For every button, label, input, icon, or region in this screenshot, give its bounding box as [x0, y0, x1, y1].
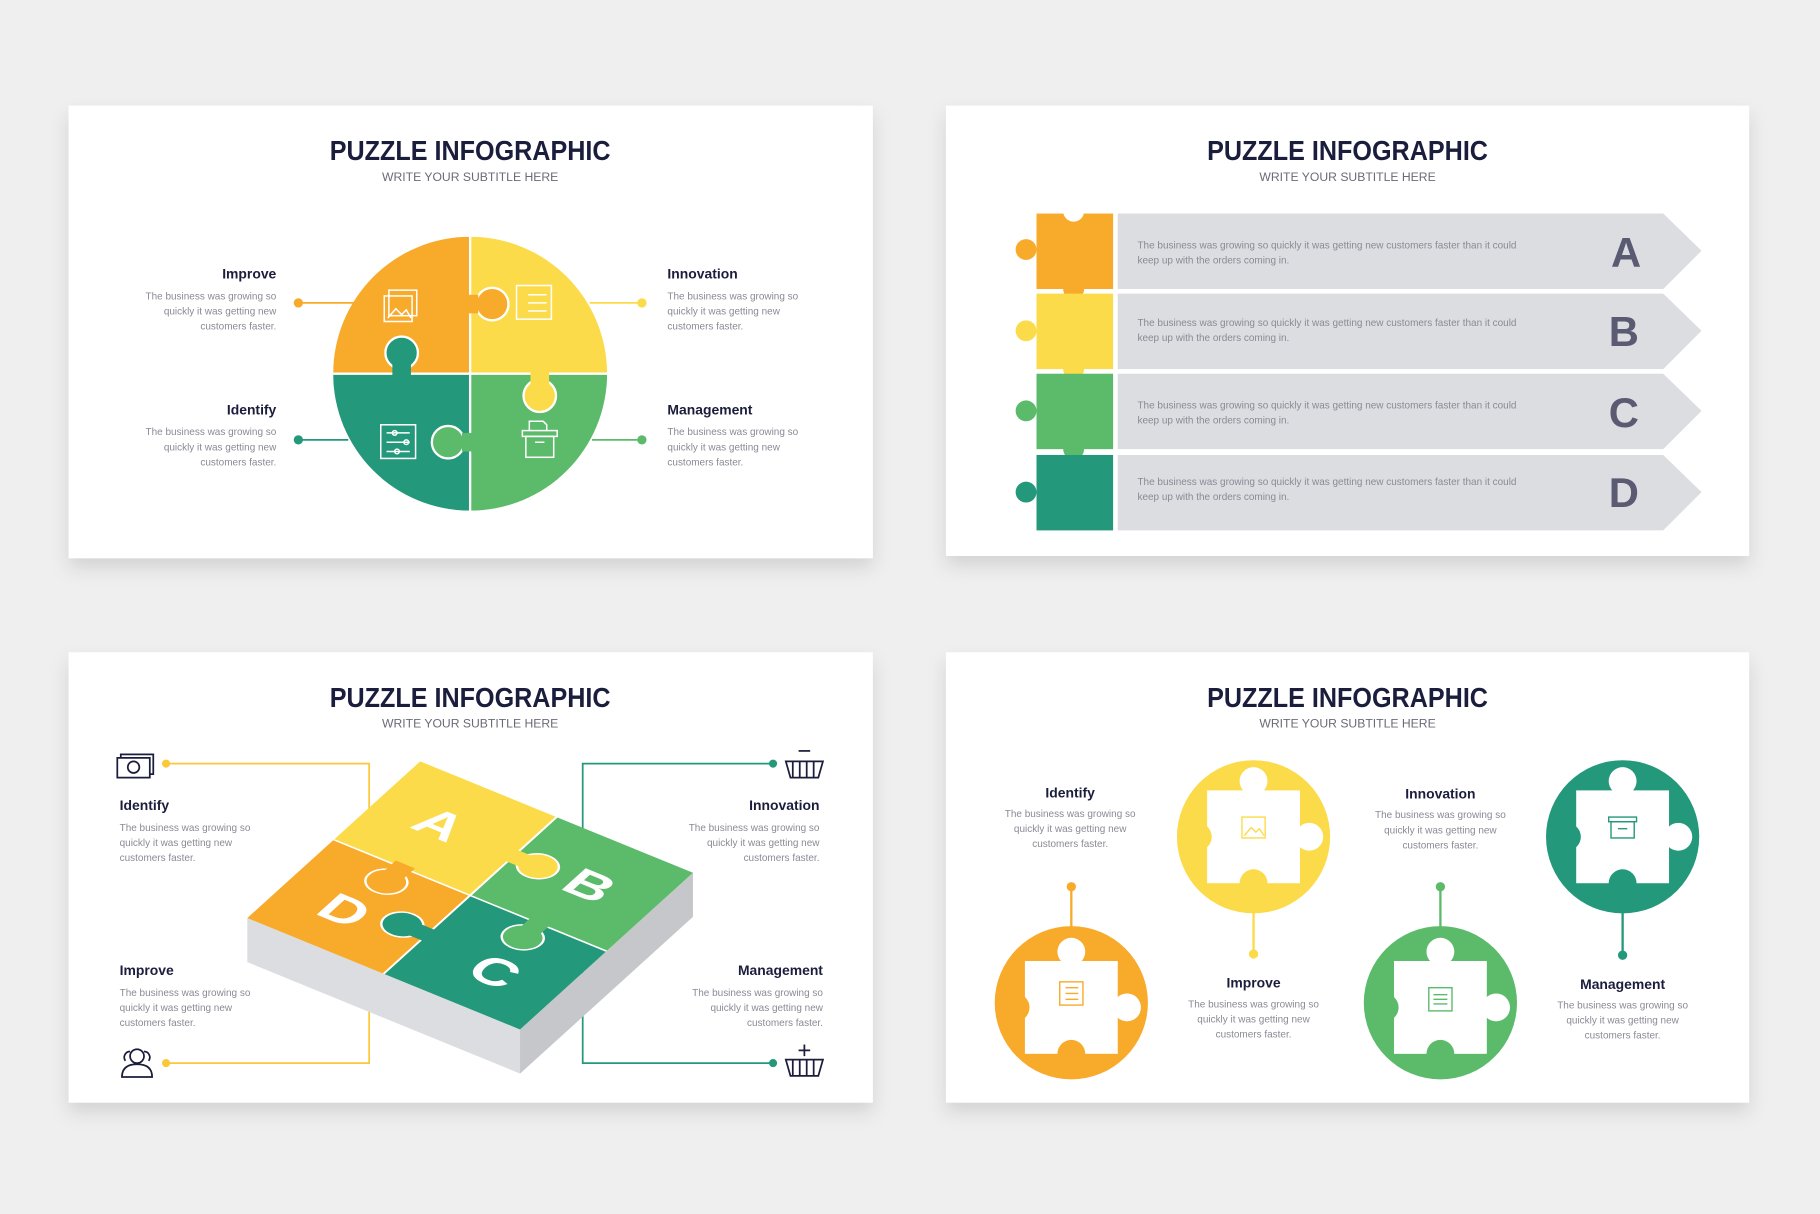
chart: circle puzzle [333, 237, 607, 511]
text: Identify: The business was growing so [120, 823, 251, 834]
text: Management: Management [738, 962, 823, 978]
row A: keep up with the orders coming in. [1137, 255, 1289, 266]
callout: Management: Management [667, 401, 753, 417]
icon: list [517, 286, 551, 319]
callout: Improve: quickly it was getting new [164, 307, 277, 318]
text: Improve: The business was growing so [1188, 999, 1319, 1010]
subtitle: WRITE YOUR SUBTITLE HERE [382, 717, 558, 731]
text: Management: Management [1580, 976, 1665, 992]
callout: Management [592, 401, 799, 468]
icon: users [122, 1049, 152, 1077]
text: Improve: The business was growing so [120, 988, 251, 999]
row C: keep up with the orders coming in. [1137, 416, 1289, 427]
text: Improve: quickly it was getting new [120, 1003, 233, 1014]
text: Innovation: Innovation [1405, 786, 1476, 802]
circle: orange [995, 882, 1148, 1079]
circle: yellow [1177, 760, 1330, 959]
chart: isometric puzzle board: B [550, 861, 628, 911]
text: Improve: customers faster. [120, 1018, 196, 1029]
subtitle: WRITE YOUR SUBTITLE HERE [1259, 717, 1436, 731]
chart: isometric puzzle board: D [305, 885, 383, 936]
callout: Identify: The business was growing so [146, 427, 277, 438]
text: Identify: quickly it was getting new [120, 838, 233, 849]
text: Management: quickly it was getting new [710, 1003, 824, 1014]
text: Management: customers faster. [747, 1018, 823, 1029]
text: Innovation: The business was growing so [689, 823, 820, 834]
text: Identify: The business was growing so [1005, 809, 1136, 820]
chart: isometric puzzle board [247, 761, 693, 1074]
row C [1016, 374, 1702, 460]
chart: isometric puzzle board: C [455, 947, 533, 998]
row D: keep up with the orders coming in. [1137, 492, 1289, 503]
text: Improve: customers faster. [1216, 1030, 1291, 1041]
callout: Management: quickly it was getting new [667, 442, 781, 453]
text: Innovation [1375, 786, 1506, 851]
callout: Innovation: Innovation [667, 266, 738, 282]
subtitle: WRITE YOUR SUBTITLE HERE [382, 170, 558, 184]
text: Management [692, 962, 824, 1029]
text: Management: The business was growing so [692, 988, 823, 999]
text: Identify: Identify [1045, 784, 1095, 800]
row B: The business was growing so quickly it was getting new customers faster than it could [1137, 318, 1516, 329]
row A: A [1611, 229, 1641, 276]
circle: green [1364, 882, 1517, 1079]
row D: The business was growing so quickly it was getting new customers faster than it could [1137, 477, 1516, 488]
callout: Identify: quickly it was getting new [164, 442, 277, 453]
text: Innovation: quickly it was getting new [707, 838, 820, 849]
subtitle: WRITE YOUR SUBTITLE HERE [1259, 170, 1436, 184]
icon: box [522, 421, 557, 457]
text: Identify: Identify [120, 797, 169, 813]
text: Identify: customers faster. [1032, 839, 1108, 850]
icon: basket minus [786, 751, 823, 778]
row D: D [1609, 469, 1639, 516]
row D [1016, 455, 1702, 530]
callout: Management: customers faster. [667, 457, 743, 468]
icon: image [384, 290, 417, 321]
callout: Identify [146, 401, 348, 468]
text: Management: quickly it was getting new [1566, 1016, 1680, 1027]
connector lines [162, 760, 777, 1067]
callout: Identify: Identify [227, 401, 277, 417]
text: Identify [120, 797, 251, 864]
row A [1016, 201, 1702, 299]
callout: Improve: customers faster. [200, 322, 276, 333]
text: Innovation: Innovation [749, 797, 819, 813]
text: Innovation [689, 797, 820, 864]
title: PUZZLE INFOGRAPHIC [330, 682, 611, 713]
callout: Innovation: quickly it was getting new [667, 307, 781, 318]
row C: The business was growing so quickly it was getting new customers faster than it could [1137, 401, 1516, 412]
text: Improve: Improve [120, 962, 174, 978]
panel: circle pieces [946, 652, 1749, 1103]
text: Innovation: customers faster. [744, 853, 819, 864]
row A: The business was growing so quickly it was getting new customers faster than it could [1137, 240, 1516, 251]
row B: keep up with the orders coming in. [1137, 333, 1289, 344]
panel: ABCD banners [946, 106, 1749, 556]
panel: isometric puzzle [69, 652, 873, 1103]
text: Improve: quickly it was getting new [1197, 1014, 1311, 1025]
text: Innovation: The business was growing so [1375, 810, 1506, 821]
circle: teal [1546, 760, 1699, 960]
title: PUZZLE INFOGRAPHIC [1207, 682, 1488, 713]
text: Identify [1005, 784, 1136, 850]
callout: Improve: Improve [222, 266, 277, 282]
text: Innovation: customers faster. [1402, 840, 1478, 851]
callout: Improve [146, 266, 354, 333]
icon: sliders [381, 425, 416, 458]
callout: Identify: customers faster. [200, 457, 276, 468]
row B [1016, 294, 1702, 380]
text: Management: customers faster. [1585, 1031, 1661, 1042]
panel: circle puzzle [69, 106, 873, 558]
icon: money [117, 754, 153, 778]
text: Improve: Improve [1226, 975, 1281, 991]
text: Improve [1188, 975, 1319, 1041]
text: Innovation: quickly it was getting new [1384, 825, 1497, 836]
text: Management [1557, 976, 1688, 1042]
text: Improve [120, 962, 251, 1029]
row C: C [1609, 389, 1639, 436]
callout: Innovation [590, 266, 799, 333]
callout: Innovation: customers faster. [667, 322, 743, 333]
callout: Improve: The business was growing so [146, 291, 277, 302]
text: Identify: customers faster. [120, 853, 196, 864]
callout: Innovation: The business was growing so [667, 291, 799, 302]
row B: B [1609, 308, 1639, 355]
icon: basket plus [786, 1045, 823, 1076]
callout: Management: The business was growing so [667, 427, 799, 438]
text: Management: The business was growing so [1557, 1001, 1688, 1012]
text: Identify: quickly it was getting new [1014, 824, 1127, 835]
title: PUZZLE INFOGRAPHIC [330, 135, 611, 166]
title: PUZZLE INFOGRAPHIC [1207, 135, 1488, 166]
chart: isometric puzzle board: A [400, 799, 478, 850]
